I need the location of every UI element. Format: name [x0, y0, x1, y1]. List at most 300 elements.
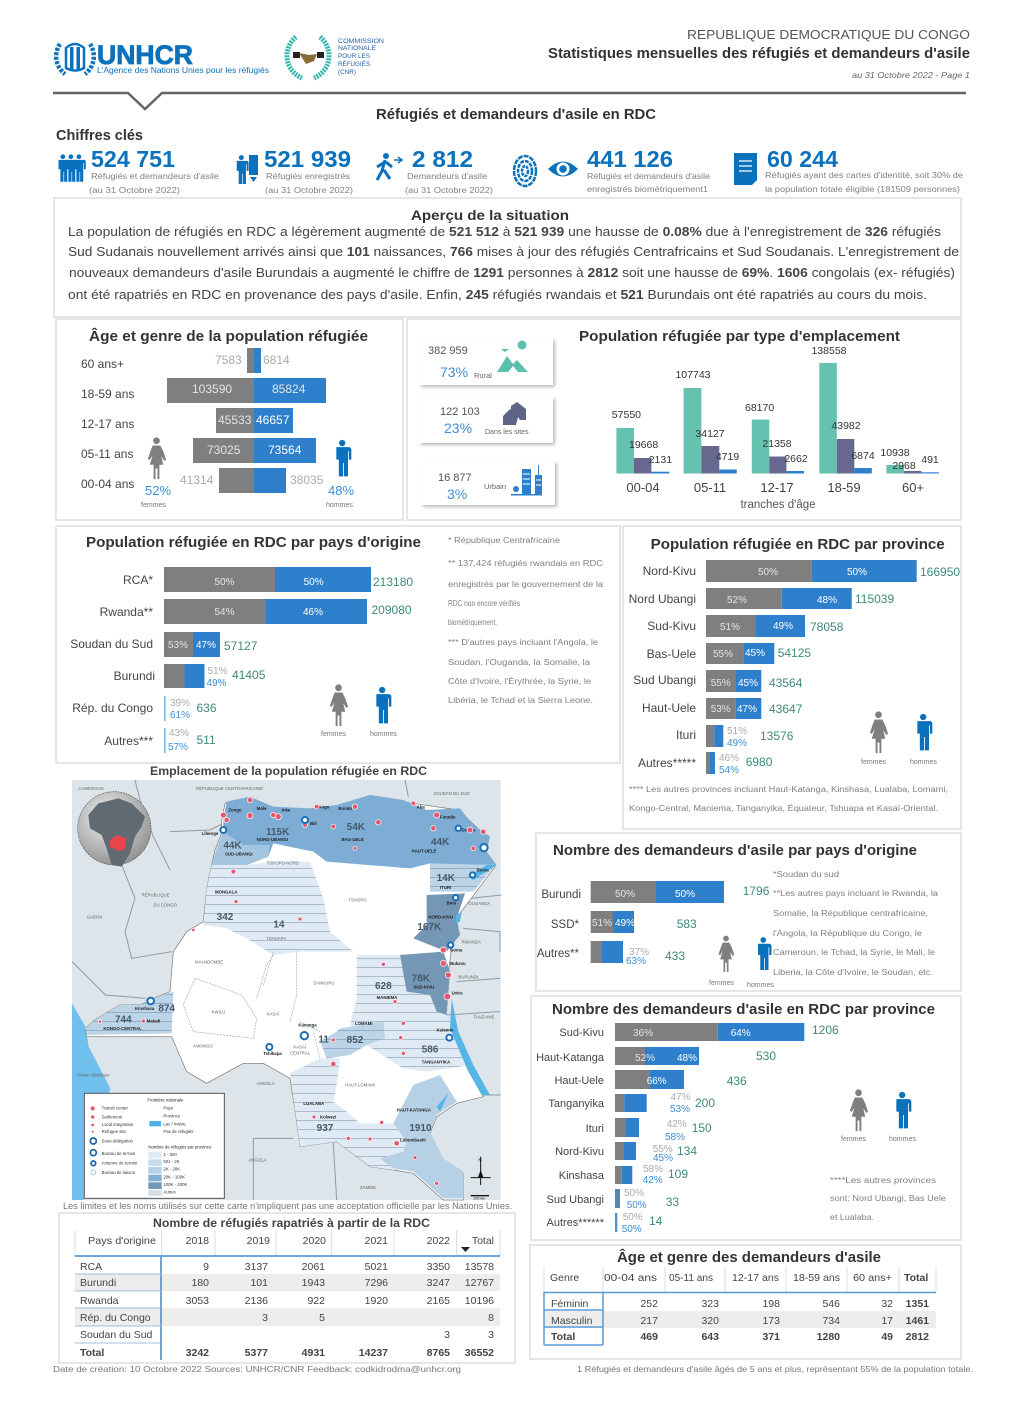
table: Genre — [550, 1272, 579, 1284]
province labels: HAUT-KATANGA — [397, 1108, 432, 1113]
bar chart: 51% — [720, 622, 740, 633]
pyramid chart: 85824 — [272, 382, 306, 396]
header title block: Statistiques mensuelles des réfugiés et demandeurs d'asile — [548, 45, 970, 62]
site names — [135, 804, 489, 1143]
bar chart: 55% — [713, 649, 733, 660]
refugee figures per province: 115K — [266, 827, 290, 838]
province labels: TSHUAPA — [266, 936, 286, 941]
province labels: KWILU — [212, 1009, 225, 1014]
heading: Population réfugiée par type d'emplacement — [579, 329, 900, 345]
bar chart: 109 — [668, 1167, 688, 1181]
bar chart: 14 — [649, 1214, 663, 1228]
bar chart: Autres***** — [638, 756, 696, 770]
bar chart: 52% — [727, 595, 747, 606]
icon: man — [910, 714, 937, 766]
refugee figures per province: 11 — [318, 1034, 329, 1045]
table: 1280 — [817, 1331, 840, 1343]
site names: Matadi — [147, 1018, 160, 1023]
table: 2021 — [365, 1235, 388, 1247]
table: RCA — [80, 1261, 102, 1273]
province labels: KWANGO — [193, 1044, 214, 1049]
table: Féminin — [551, 1298, 589, 1310]
table: Pays d'origine — [88, 1235, 156, 1247]
logo: CNR: NATIONALE — [338, 46, 376, 52]
table: 1943 — [302, 1277, 325, 1289]
legend: Province — [163, 1114, 181, 1119]
bar chart: Haut-Katanga — [536, 1052, 605, 1064]
logo: CNR: (CNR) — [338, 70, 356, 76]
site names: Kananga — [298, 1023, 317, 1028]
footnotes: **Les autres pays incluant le Rwanda, la — [773, 889, 939, 898]
table: 180 — [191, 1277, 209, 1289]
site names: Bunia — [477, 868, 489, 873]
table — [544, 1267, 936, 1345]
refugee figures per province: 167K — [417, 922, 442, 933]
bar chart: location by age: 00-04 — [626, 480, 660, 495]
country labels: CAMEROUN — [78, 786, 104, 791]
DRC territory — [85, 797, 495, 1200]
bar chart: location by age: 4719 — [716, 451, 739, 463]
bar chart: 50% — [624, 1188, 644, 1199]
table: 198 — [762, 1298, 780, 1310]
bar chart: location by age: 43982 — [831, 420, 861, 432]
table: 10196 — [465, 1295, 494, 1307]
icon: man: hommes — [889, 1136, 916, 1143]
province labels: MONGALA — [215, 889, 238, 894]
icon: fingerprint — [514, 156, 536, 186]
bar chart: 61% — [170, 710, 190, 721]
table: 2022 — [427, 1235, 450, 1247]
bar chart: location by age: 05-11 — [694, 480, 726, 495]
icon: man: hommes — [747, 982, 774, 989]
province labels: KASAÏ — [267, 1012, 280, 1017]
table: 922 — [307, 1295, 325, 1307]
markers: refugee sites — [98, 797, 486, 1185]
bar chart: 134 — [677, 1144, 697, 1158]
site names: Aba — [417, 804, 425, 809]
bar chart: 64% — [731, 1028, 751, 1039]
KPI: asylum seekers: 2 812 — [412, 146, 473, 172]
site names: Bili — [310, 821, 317, 826]
bar chart: Nord Ubangi — [629, 592, 696, 606]
bar chart: 53% — [711, 704, 731, 715]
country labels: RÉPUBLIQUE — [142, 893, 170, 898]
footnote: et Lualaba. — [830, 1213, 874, 1222]
bar chart: 51% — [592, 918, 612, 929]
bar chart: 50% — [758, 567, 778, 578]
icon: woman — [321, 684, 348, 738]
pyramid chart: 45533 — [218, 413, 252, 427]
icon: woman — [841, 1089, 868, 1143]
table: 252 — [640, 1298, 658, 1310]
heading: Population réfugiée en RDC par pays d'origine — [86, 535, 421, 551]
bar chart: 50% — [214, 577, 235, 588]
pyramid chart: 18-59 ans — [81, 387, 134, 401]
bar chart: 39% — [170, 698, 190, 709]
bar chart: Sud-Kivu — [647, 619, 696, 633]
bar chart: 530 — [756, 1049, 776, 1063]
bar chart: 57% — [168, 742, 188, 753]
refugee figures per province: 874 — [158, 1004, 175, 1015]
share women: 52% — [145, 483, 171, 498]
table: 05-11 ans — [669, 1272, 713, 1284]
refugee figures per province: 342 — [217, 912, 234, 923]
footnotes: * République Centrafricaine — [448, 536, 561, 545]
bar chart: location by age: 34127 — [695, 428, 725, 440]
site names: Goma — [450, 948, 463, 953]
bar chart: 50% — [675, 889, 695, 900]
KPI: registered refugees: Réfugiés enregistrés — [266, 172, 350, 181]
legend: Autres — [163, 1190, 176, 1195]
bar chart: 47% — [671, 1092, 691, 1103]
north arrow and scale — [471, 1157, 491, 1201]
bar chart: 49% — [206, 678, 227, 689]
province labels: HAUT-UELE — [412, 848, 437, 853]
table: Rwanda — [80, 1295, 119, 1307]
refugee figures per province: 54K — [347, 822, 366, 833]
bar chart: 51% — [208, 666, 228, 677]
bar chart: 57127 — [224, 639, 258, 653]
heading: aperçu: Aperçu de la situation — [411, 207, 569, 223]
pyramid chart: 73564 — [268, 443, 302, 457]
pyramid chart: 41314 — [180, 473, 214, 487]
bar chart: 48% — [677, 1053, 697, 1064]
bar chart: location by age — [612, 345, 939, 511]
bar chart: 36% — [633, 1028, 653, 1039]
footnotes: Somalie, la République centrafricaine, — [773, 909, 928, 918]
bar chart: 58% — [665, 1132, 685, 1143]
card: urbain: 3% — [447, 486, 467, 502]
icon: person and form — [237, 155, 258, 184]
footnotes: Soudan, l'Ouganda, la Somalie, la — [448, 658, 591, 667]
icon: woman — [148, 437, 166, 479]
bar chart: location by age: 6874 — [851, 450, 875, 462]
bar chart: Burundi — [114, 669, 155, 683]
bar chart: 63% — [626, 956, 646, 967]
bar chart: 150 — [692, 1121, 712, 1135]
refugee figures per province: 14K — [437, 873, 456, 884]
bar chart: 49% — [727, 738, 747, 749]
footnotes: *Soudan du sud — [773, 870, 839, 879]
icon: woman: femmes — [841, 1136, 866, 1143]
table: 12767 — [465, 1277, 494, 1289]
map disclaimer: Les limites et les noms utilisés sur cette carte n'impliquent pas une acceptation officielle par les Nations Unies. — [63, 1201, 512, 1211]
header title block — [548, 27, 970, 80]
bar chart: 6980 — [746, 755, 773, 769]
bar chart: 50% — [304, 577, 324, 588]
province labels: SUD-UBANGI — [225, 852, 253, 857]
legend: Refugee site — [102, 1129, 127, 1134]
heading: map: Emplacement de la population réfugiée en RDC — [150, 764, 427, 778]
country labels: BURUNDI — [458, 974, 478, 979]
header title block: REPUBLIQUE DEMOCRATIQUE DU CONGO — [687, 27, 970, 42]
icon: woman: femmes — [709, 980, 734, 987]
table: 320 — [701, 1315, 719, 1327]
province labels: BAS-UELE — [342, 837, 364, 842]
bar chart: 51% — [727, 726, 747, 737]
table: Rép. du Congo — [80, 1312, 151, 1324]
site names: Dungu — [462, 828, 476, 833]
table: 2020 — [303, 1235, 326, 1247]
province labels: NORD-UBANGI — [257, 837, 288, 842]
footnotes: l'Angola, la République du Congo, le — [773, 929, 923, 938]
heading: Âge et genre de la population réfugiée — [89, 327, 368, 345]
globe inset — [78, 792, 151, 867]
pyramid chart: 00-04 ans — [81, 477, 134, 491]
refugee figures per province: 1910 — [409, 1123, 432, 1134]
bar chart: 583 — [677, 917, 697, 931]
card: urbain — [421, 461, 555, 505]
bar chart: Haut-Uele — [554, 1075, 604, 1087]
pyramid chart: 12-17 ans — [81, 417, 134, 431]
bar chart: 49% — [615, 918, 635, 929]
footnote: **** Les autres provinces incluant Haut-Katanga, Kinshasa, Lualaba, Lomami, — [629, 785, 948, 794]
refugee figures per province: 937 — [317, 1123, 334, 1134]
table: Burundi — [80, 1277, 116, 1289]
bar chart: 53% — [670, 1104, 690, 1115]
site names: Beni — [447, 900, 456, 905]
legend: Frontière nationale — [147, 1098, 184, 1103]
icon: woman — [861, 711, 888, 766]
share men — [326, 483, 354, 509]
footnotes: biométriquement. — [448, 618, 497, 627]
panel: population réfugiée par province — [623, 526, 961, 829]
table: 2136 — [245, 1295, 268, 1307]
bar chart: 636 — [196, 701, 217, 715]
province labels: LOMAMI — [355, 1021, 373, 1026]
bar chart: 33 — [666, 1195, 679, 1209]
panel: demandeurs d'asile par pays d'origine — [536, 833, 961, 991]
table: 3053 — [186, 1295, 209, 1307]
bar chart: Ituri — [586, 1123, 604, 1135]
refugee figures per province — [115, 822, 456, 1134]
footnote: Kongo-Central, Maniema, Tanganyika, Équateur, Tshuapa et Kasaï-Oriental. — [629, 804, 938, 813]
bar chart: location by age: 68170 — [745, 402, 774, 414]
refugee figures per province: 628 — [375, 981, 392, 992]
bar chart: 52% — [635, 1053, 655, 1064]
bar chart: 115039 — [855, 592, 894, 606]
legend: Local integration — [102, 1122, 134, 1127]
card: rural — [419, 338, 553, 385]
bar chart: 50% — [615, 889, 635, 900]
bar chart: Haut-Uele — [642, 701, 696, 715]
KPI: biometric registration: 441 126 — [587, 146, 673, 172]
bar chart: RCA* — [123, 573, 153, 587]
province labels — [103, 837, 453, 1113]
table: Masculin — [551, 1315, 593, 1327]
legend: Bureau de liaison — [102, 1170, 136, 1175]
province boundaries — [183, 952, 320, 1058]
table: 5021 — [365, 1261, 388, 1273]
table: 546 — [822, 1298, 840, 1310]
header rule with notch — [53, 93, 966, 109]
table: 1461 — [906, 1315, 929, 1327]
bar chart — [537, 881, 770, 967]
bar chart: Rwanda** — [100, 605, 153, 619]
card: dans les sites: 23% — [444, 420, 472, 436]
refugee figures per province: 78K — [412, 974, 431, 985]
table: 3350 — [427, 1261, 450, 1273]
legend: Bureau de terrain — [102, 1151, 136, 1156]
pyramid chart: 46657 — [256, 413, 290, 427]
logo: CNR: POUR LES — [338, 54, 370, 60]
bar chart: 49% — [773, 621, 793, 632]
KPI: asylum seekers: Demandeurs d'asile — [407, 172, 488, 181]
KPI: identity cards: la population totale éligible (181509 personnes) — [765, 185, 960, 194]
logo: UNHCR: UNHCR — [97, 40, 193, 70]
bar chart: 1796 — [743, 884, 770, 898]
province labels: KONGO-CENTRAL — [103, 1026, 142, 1031]
legend: 100K - 200K — [163, 1182, 188, 1187]
share men: 48% — [328, 483, 354, 498]
refugee figures per province: 586 — [422, 1044, 439, 1055]
bar chart: 54% — [719, 765, 739, 776]
country labels: GABON — [87, 914, 102, 919]
bar chart: Burundi — [541, 889, 581, 901]
bar chart: 511 — [196, 733, 216, 747]
table: 13578 — [465, 1261, 494, 1273]
KPI: biometric registration: Réfugiés et demandeurs d'asile — [587, 172, 711, 181]
icon: document — [734, 153, 757, 185]
icon: eye — [548, 162, 578, 176]
KPI: biometric registration: enregistrés biométriquement1 — [587, 185, 709, 194]
bar chart: Soudan du Sud — [70, 637, 153, 651]
province labels: HAUT-LOMAMI — [345, 1083, 375, 1088]
site names: Bukavu — [450, 961, 466, 966]
bar chart: 50% — [623, 1212, 643, 1223]
pyramid chart: 38035 — [290, 473, 324, 487]
bar chart: SSD* — [551, 919, 580, 931]
icon: woman — [709, 936, 734, 987]
footnotes — [448, 536, 604, 705]
province labels: SANKURU — [313, 980, 335, 985]
country labels: ANGOLA — [248, 1158, 266, 1163]
table: 14237 — [359, 1347, 388, 1359]
table: Total — [551, 1331, 575, 1343]
province labels: TSHOPO-NORD — [267, 860, 299, 865]
bar chart: location by age: 18-59 — [827, 480, 861, 495]
bar chart: 43564 — [769, 676, 803, 690]
table: 36552 — [465, 1347, 494, 1359]
site names: Libenge — [202, 831, 219, 836]
bar chart: location by age: 2968 — [892, 460, 916, 472]
bar chart: 166950 — [920, 565, 960, 579]
footnote: sont: Nord Ubangi, Bas Uele — [830, 1194, 947, 1203]
bar chart: 37% — [629, 947, 649, 958]
bar chart: 50% — [627, 1200, 647, 1211]
table: 12-17 ans — [732, 1272, 779, 1284]
card: rural: 73% — [440, 364, 468, 380]
bar chart: 58% — [643, 1164, 663, 1175]
bar chart: location by age: 21358 — [762, 438, 792, 450]
refugee figures per province: 44K — [223, 840, 242, 851]
table: Total — [80, 1347, 104, 1359]
bar chart: Sud Ubangi — [633, 673, 696, 687]
site names: Lubumbashi — [400, 1138, 426, 1143]
pyramid chart: 7583 — [215, 353, 242, 367]
logo: CNR: COMMISSION — [338, 39, 384, 45]
pyramid chart: 103590 — [192, 382, 232, 396]
bar chart: 55% — [711, 678, 731, 689]
main heading: Réfugiés et demandeurs d'asile en RDC — [376, 107, 657, 123]
KPI: refugees and asylum seekers — [58, 146, 220, 195]
legend — [84, 1093, 224, 1198]
footnotes — [773, 870, 939, 977]
legend: 2K - 20K — [163, 1167, 180, 1172]
refugee figures per province: 14 — [273, 919, 285, 930]
bar chart: 209080 — [372, 603, 412, 617]
table: 17 — [881, 1315, 893, 1327]
legend: Pas de réfugiés — [163, 1129, 193, 1134]
heading: Nombre de réfugiés rapatriés à partir de la RDC — [153, 1216, 430, 1230]
paragraph — [68, 225, 959, 302]
bar chart: location by age: 12-17 — [760, 480, 794, 495]
pyramid chart: 6814 — [263, 353, 290, 367]
site names: Tshikapa — [263, 1051, 282, 1056]
table: 49 — [881, 1331, 893, 1343]
pyramid chart: 73025 — [207, 443, 241, 457]
bar chart: 200 — [695, 1096, 715, 1110]
paragraph: Sud Sudanais nouvellement arrivés ainsi que 101 naissances, 766 mises à jour des réfugiés Centrafricains et Sud Soudanais. L'enregistrement de — [68, 245, 959, 259]
heading: Âge et genre des demandeurs d'asile — [617, 1248, 881, 1266]
paragraph: La population de réfugiés en RDC a légèrement augmenté de 521 512 à 521 939 une hausse de 0.08% due à l'enregistrement de 326 réfugiés — [68, 225, 941, 239]
country labels: ANGOLA — [257, 1081, 275, 1086]
panel: demandeurs d'asile par province — [531, 996, 961, 1240]
bar chart: Sud-Kivu — [559, 1027, 604, 1039]
footnotes: ** 137,424 réfugiés rwandais en RDC — [448, 559, 603, 568]
paragraph: ont été rapatriés en RDC en provenance des pays d'asile. Enfin, 245 réfugiés rwandais et 521 Burundais ont été rapatriés au cours du mois. — [68, 288, 927, 302]
card: dans les sites: Dans les sites — [485, 429, 529, 436]
bar chart: 41405 — [232, 668, 266, 682]
table: 3247 — [427, 1277, 450, 1289]
table: 18-59 ans — [793, 1272, 840, 1284]
bar chart: location by age: 60+ — [902, 480, 924, 495]
bar chart: 213180 — [373, 575, 413, 589]
refugee figures per province: 744 — [115, 1014, 132, 1025]
ocean — [72, 1003, 110, 1200]
KPI: registered refugees: (au 31 Octobre 2022) — [265, 186, 353, 195]
share men: hommes — [326, 502, 353, 509]
KPI: asylum seekers: (au 31 Octobre 2022) — [405, 186, 493, 195]
table: 371 — [762, 1331, 780, 1343]
north arrow and scale: N — [478, 1158, 482, 1163]
country labels: RWANDA — [462, 939, 481, 944]
icon: man — [370, 687, 397, 738]
bar chart: 45% — [738, 678, 758, 689]
KPI: identity cards: 60 244 — [767, 146, 838, 172]
site names: Kinshasa — [135, 1006, 155, 1011]
footnotes: *** D'autres pays incluant l'Angola, le — [448, 638, 599, 647]
map: refugee locations — [72, 780, 502, 1201]
icon: man: hommes — [370, 731, 397, 738]
KPI: identity cards — [734, 146, 964, 194]
province labels: MANIEMA — [377, 995, 398, 1000]
card: dans les sites — [419, 397, 553, 443]
table: 00-04 ans — [604, 1272, 657, 1284]
bar chart: Tanganyika — [548, 1098, 605, 1110]
country labels: SOUDAN DU SUD — [433, 791, 470, 796]
KPI: registered refugees — [237, 146, 353, 195]
neighbouring borders — [72, 780, 502, 1200]
bar chart: 436 — [727, 1074, 747, 1088]
panel: âge et genre de la population réfugiée — [56, 319, 403, 520]
province labels: MAI-NDOMBE — [195, 959, 223, 964]
heading: Nombre des demandeurs d'asile par pays d'origine — [553, 843, 917, 859]
legend: Nombre de réfugiés par province — [148, 1144, 212, 1149]
province labels: NORD-KIVU — [428, 914, 453, 919]
panel: réfugiés rapatriés table — [59, 1213, 515, 1363]
table: 8 — [488, 1312, 494, 1324]
